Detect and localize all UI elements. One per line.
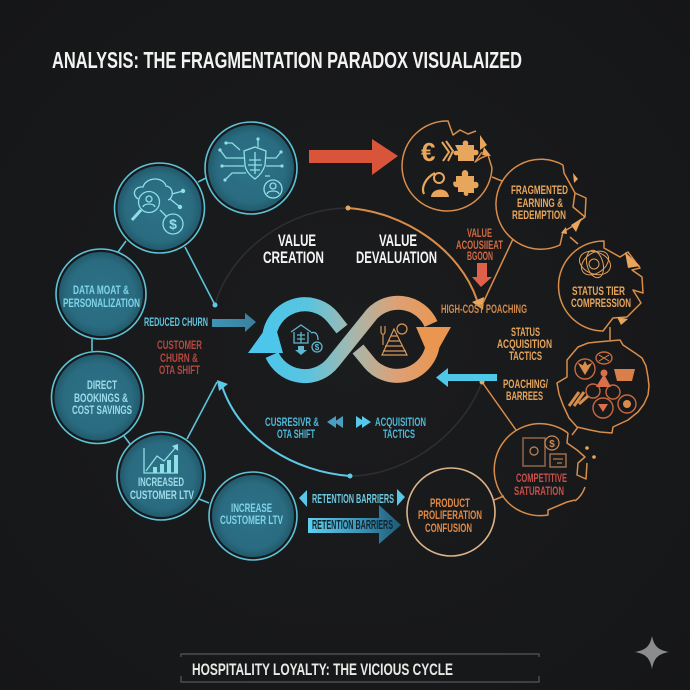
label: cusresivr and ota shift: CUSRESIVR & [265, 415, 319, 429]
icon: right double chevron [356, 416, 371, 428]
circle: product proliferation: PROLIFERATION [418, 508, 482, 522]
circle: direct bookings: BOOKINGS & [74, 391, 128, 405]
heading: value creation [263, 232, 324, 267]
circle: product proliferation: PRODUCT [430, 496, 470, 510]
circle: direct bookings [52, 352, 144, 444]
panel: value creation teal circles [52, 122, 297, 560]
heading: value devaluation: DEVALUATION [356, 249, 437, 267]
label: value acquisition boon: BGOON [467, 249, 493, 263]
footer banner: HOSPITALITY LOYALTY: THE VICIOUS CYCLE [192, 661, 453, 679]
label: value acquisition boon: ACOUSIIEAT [456, 238, 503, 252]
teal connectors [92, 178, 217, 503]
label: customer churn and ota shift [157, 338, 202, 377]
teal cycle arc [217, 380, 352, 478]
circle: status tier compression: STATUS TIER [572, 284, 625, 298]
footer banner [181, 654, 539, 682]
orange cycle arc [346, 206, 484, 310]
circle: product proliferation [407, 468, 495, 556]
icon: hotel and savings: $ [315, 343, 320, 352]
circle: data moat: DATA MOAT & [73, 283, 129, 297]
circle: fragmented earning [496, 159, 586, 249]
label: cusresivr and ota shift [265, 415, 319, 441]
faint cycle arcs [215, 208, 482, 476]
circle: fragmented puzzle icons: € [421, 137, 435, 167]
arrow: retention barriers solid: RETENTION BARRIERS [312, 518, 393, 532]
circle: competitive saturation: COMPETITIVE [516, 471, 567, 485]
circle: increase customer ltv [209, 472, 297, 560]
heading: value creation: VALUE [278, 232, 316, 250]
label: status acquisition tactics: TACTICS [509, 349, 542, 363]
icon: left double chevron [327, 416, 343, 428]
label: value acquisition boon: VALUE [467, 226, 492, 240]
icon: hotel and savings [291, 325, 322, 355]
circle: fragmented earning: EARNING & [517, 196, 563, 210]
circle: increased customer ltv: INCREASED [138, 475, 184, 489]
heading: value creation: CREATION [263, 249, 324, 267]
circle: cloud analytics: $ [169, 216, 177, 232]
icon: sparkle [635, 636, 669, 669]
circle: direct bookings: COST SAVINGS [72, 403, 132, 417]
circle: increase customer ltv: INCREASE [231, 501, 272, 515]
arrow: reduced churn arrow [212, 313, 256, 332]
label: cusresivr and ota shift: OTA SHIFT [277, 427, 315, 441]
circle: data moat [56, 249, 146, 339]
arrow: red down arrow [472, 263, 492, 287]
arrow: light blue return arrow [436, 368, 497, 387]
right lower band [358, 342, 433, 376]
circle: direct bookings: DIRECT [87, 378, 117, 392]
label: status acquisition tactics: ACQUISITION [497, 337, 552, 351]
circle: product proliferation: CONFUSION [425, 521, 472, 535]
circle: data shield [205, 122, 297, 214]
infinity loop [248, 303, 451, 376]
label: customer churn and ota shift: OTA SHIFT [159, 363, 200, 377]
label: customer churn and ota shift: CUSTOMER [157, 338, 202, 352]
label: customer churn and ota shift: CHURN & [160, 351, 198, 365]
circle: increased customer ltv: CUSTOMER LTV [130, 488, 194, 502]
circle: increase customer ltv: CUSTOMER LTV [220, 513, 283, 527]
circle: fragmented earning: FRAGMENTED [511, 183, 568, 197]
label: status acquisition tactics [497, 325, 552, 363]
circle: poaching icons [557, 340, 649, 433]
label: poaching barriers [503, 377, 548, 403]
circle: competitive saturation: $ [549, 439, 555, 450]
circle: status tier compression: COMPRESSION [571, 296, 631, 310]
circle: increased customer ltv [117, 432, 205, 520]
label: acquisition tactics: TACTICS [383, 427, 415, 441]
panel: value devaluation orange circles [402, 121, 649, 556]
arrow: retention barriers solid [308, 505, 401, 544]
arrow: retention barriers double-headed [299, 489, 405, 507]
circle: status tier compression [558, 241, 643, 331]
right arrowhead [416, 327, 451, 350]
crossing band [272, 303, 431, 376]
circle: cloud analytics [114, 163, 204, 253]
label: high-cost poaching: HIGH-COST POACHING [441, 302, 527, 316]
label: poaching barriers: POACHING/ [503, 377, 548, 391]
label: acquisition tactics [375, 415, 426, 441]
teal connector end dot [212, 302, 218, 308]
label: status acquisition tactics: STATUS [511, 325, 540, 339]
label: acquisition tactics: ACQUISITION [375, 415, 426, 429]
left arrowhead [248, 328, 283, 353]
label: reduced churn: REDUCED CHURN [144, 315, 208, 329]
icon: status pyramid [381, 324, 407, 355]
circle: competitive saturation [494, 424, 596, 516]
heading: value devaluation [356, 232, 437, 267]
orange connectors [482, 177, 610, 500]
arrow: retention barriers double-headed: RETENTION BARRIERS [312, 492, 394, 506]
label: poaching barriers: BARREES [506, 389, 543, 403]
heading: value devaluation: VALUE [379, 232, 417, 250]
circle: fragmented earning: REDEMPTION [512, 208, 566, 222]
circle: fragmented puzzle icons [402, 121, 492, 211]
label: value acquisition boon [456, 226, 503, 263]
left upper band [269, 304, 342, 340]
arrow: red transition arrow [309, 139, 398, 175]
circle: data moat: PERSONALIZATION [63, 296, 140, 310]
circle: competitive saturation: SATURATION [514, 484, 564, 498]
orange connector end dot [480, 380, 484, 384]
